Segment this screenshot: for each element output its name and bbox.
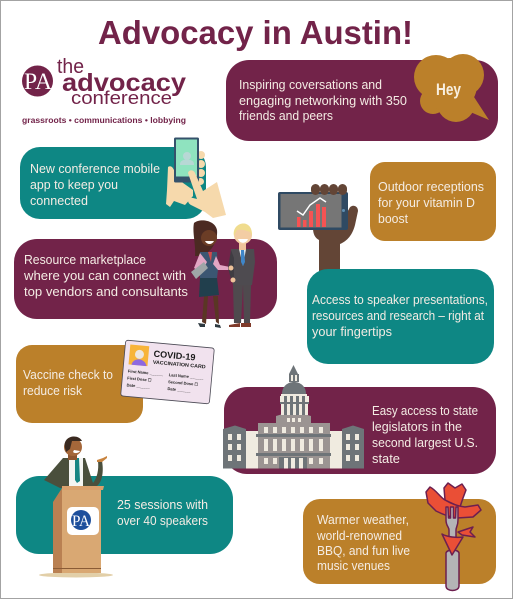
panel: warmer weather and BBQ: music venues <box>317 558 390 573</box>
panel: warmer weather and BBQ: world-renowned <box>316 528 402 543</box>
illustration: capitol building <box>223 365 364 468</box>
panel: resource marketplace <box>14 239 277 319</box>
icon: covid vaccination card: Date ______ <box>126 382 151 390</box>
panel: vaccine check: Vaccine check to <box>23 367 113 382</box>
illustration: two business people <box>191 220 255 328</box>
panel: speaker presentations: Access to speaker presentations, <box>312 292 488 307</box>
panel: outdoor receptions: Outdoor receptions <box>378 179 484 194</box>
panel: vaccine check <box>16 345 143 423</box>
panel: speaker presentations: your fingertips <box>312 324 392 339</box>
panel: outdoor receptions: boost <box>378 211 408 226</box>
panel: mobile app: app to keep you <box>30 177 118 192</box>
panel: state legislators <box>224 387 496 474</box>
icon: covid vaccination card: Second Dose ☐ <box>168 379 199 387</box>
panel: sessions and speakers <box>16 476 233 554</box>
panel: state legislators: state <box>372 451 400 466</box>
panel: resource marketplace: Resource marketplace <box>24 252 146 267</box>
logo: the advocacy conference <box>22 56 186 125</box>
logo: the advocacy conference: the <box>57 56 84 78</box>
panel: outdoor receptions <box>370 162 496 241</box>
logo: the advocacy conference: grassroots • communications • lobbying <box>22 115 186 125</box>
icon: hand holding tablet with chart <box>278 184 358 276</box>
icon: covid vaccination card: COVID-19 <box>153 349 196 362</box>
panel: conversations: friends and peers <box>239 108 333 123</box>
panel: state legislators: legislators in the <box>372 419 462 434</box>
panel: mobile app: connected <box>30 193 88 208</box>
panel: sessions and speakers: over 40 speakers <box>117 513 208 528</box>
panel: conversations <box>226 60 498 141</box>
icon: covid vaccination card: First Dose ☐ <box>127 375 152 383</box>
panel: resource marketplace: top vendors and consultants <box>24 284 188 299</box>
icon: speech bubble Hey: Hey <box>436 80 461 99</box>
logo: the advocacy conference: advocacy <box>62 69 186 97</box>
panel: mobile app: New conference mobile <box>30 161 160 176</box>
panel: conversations: Inspiring coversations and <box>239 77 382 92</box>
panel: state legislators: Easy access to state <box>372 403 478 418</box>
panel: speaker presentations <box>307 269 494 364</box>
panel: warmer weather and BBQ: Warmer weather, <box>317 512 409 527</box>
panel: state legislators: second largest U.S. <box>372 435 478 450</box>
icon: fork with cowboy hat and bandana <box>426 483 481 590</box>
logo: the advocacy conference: conference <box>71 88 172 108</box>
panel: outdoor receptions: for your vitamin D <box>378 195 475 210</box>
panel: resource marketplace: where you can connect with <box>23 268 186 283</box>
panel: warmer weather and BBQ <box>303 499 496 584</box>
icon: covid vaccination card: Date ______ <box>167 386 192 393</box>
panel: speaker presentations: resources and research – right at <box>312 308 484 323</box>
panel: conversations: engaging networking with 350 <box>239 93 407 108</box>
icon: covid vaccination card: First Name ______ <box>128 368 164 377</box>
panel: sessions and speakers: 25 sessions with <box>117 497 208 512</box>
panel: mobile app <box>20 147 206 219</box>
logo: the advocacy conference: PA <box>24 69 52 94</box>
panel: vaccine check: reduce risk <box>23 383 83 398</box>
illustration: speaker at podium <box>39 437 113 578</box>
icon: covid vaccination card: VACCINATION CARD <box>153 360 206 370</box>
icon: speech bubble Hey <box>414 54 489 122</box>
icon: covid vaccination card: Last Name ______ <box>169 372 204 380</box>
panel: warmer weather and BBQ: BBQ, and fun live <box>317 543 410 558</box>
icon: hands holding phone <box>166 138 226 218</box>
icon: covid vaccination card <box>121 340 214 404</box>
illustration: speaker at podium: PA <box>72 513 90 530</box>
title: Advocacy in Austin! <box>98 14 413 51</box>
